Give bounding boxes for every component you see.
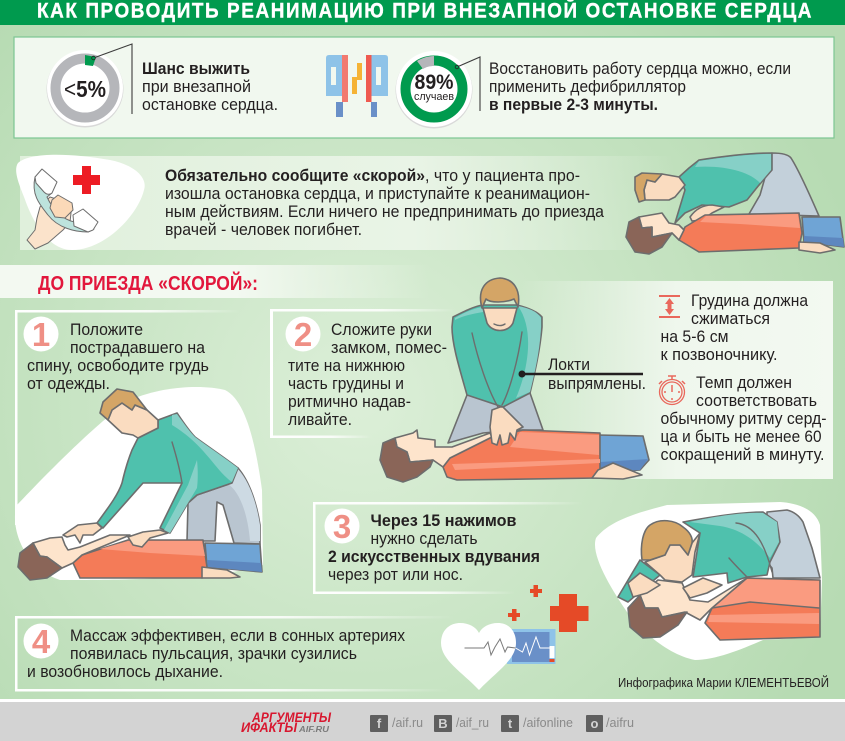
text: compression rate: соответствовать (696, 392, 817, 410)
text: step 2: ливайте. (288, 411, 352, 429)
logo: AIF.RU (298, 725, 329, 734)
text: step 1: от одежды. (27, 375, 110, 393)
panel: survival statistics (14, 37, 834, 138)
text: compression depth (660, 292, 809, 364)
logo: АРГУМЕНТЫ (251, 710, 331, 725)
text: step 2: часть грудины и (288, 375, 404, 393)
text: step 4: Массаж эффективен, если в сонных артериях (70, 627, 406, 645)
icon: hand holding phone (27, 169, 98, 249)
heading: before ambulance arrives (0, 265, 430, 298)
step number 2 (286, 316, 320, 353)
panel: call ambulance (16, 153, 844, 254)
text: step 1: Положите (70, 321, 143, 339)
text: step 3: Через 15 нажимов (370, 512, 516, 530)
text: defibrillator timing: в первые 2-3 минуты. (489, 96, 658, 114)
callout: straight elbows (518, 356, 646, 393)
step number 3 (324, 508, 360, 545)
social: vk (434, 715, 489, 732)
text: defibrillator timing: Восстановить работу сердца можно, если (489, 60, 791, 78)
text: step 1 (27, 321, 209, 393)
text: compression depth: Грудина должна (691, 292, 809, 310)
step number 1 (24, 316, 58, 353)
step number 3: 3 (333, 508, 351, 545)
footer (0, 699, 845, 741)
text: defibrillator timing: применить дефибриллятор (489, 78, 686, 96)
social: odnoklassniki: /aifru (606, 716, 634, 730)
chart: defibrillator donut 89% (396, 51, 480, 128)
text: compression rate: обычному ритму серд- (660, 410, 826, 428)
icon: red cross (73, 166, 100, 194)
text: step 1: пострадавшего на (70, 339, 206, 357)
social: twitter: t (508, 716, 513, 731)
text: survival chance: Шанс выжить (142, 60, 250, 78)
text: defibrillator timing (489, 60, 791, 114)
icon: stopwatch (659, 376, 685, 404)
panel: step 1 (15, 310, 263, 580)
heading: before ambulance arrives: ДО ПРИЕЗДА «СКОРОЙ»: (38, 271, 258, 295)
text: compression rate: Темп должен (696, 374, 792, 392)
icon: compression depth (659, 295, 680, 318)
callout: straight elbows: выпрямлены. (548, 375, 646, 393)
text: step 4: и возобновилось дыхание. (27, 663, 223, 681)
text: compression rate: ца и быть не менее 60 (660, 428, 822, 446)
step number 4 (24, 623, 58, 660)
social: odnoklassniki: о (591, 716, 599, 731)
text: call instruction (165, 167, 605, 239)
illustration: white blob behind rescue breaths (595, 502, 822, 660)
frame and blob (15, 310, 263, 580)
text: step 2 (288, 321, 447, 429)
text: call instruction: ным действиям. Если ничего не предпринимать до приезда (165, 203, 605, 221)
text: step 2: Сложите руки (331, 321, 432, 339)
panel: step 3 (313, 502, 822, 660)
step number 1: 1 (32, 316, 50, 353)
credit: Инфографика Марии КЛЕМЕНТЬЕВОЙ (618, 675, 829, 690)
text: survival chance: при внезапной (142, 78, 251, 96)
icon: defibrillator paddles (326, 55, 388, 117)
text: step 1: спину, освободите грудь (27, 357, 209, 375)
social: odnoklassniki (586, 715, 634, 732)
text: survival chance: остановке сердца. (142, 96, 278, 114)
frame (15, 616, 455, 692)
text: call instruction: изошла остановка сердца, и приступайте к реанимацион- (165, 185, 590, 203)
callout: straight elbows: Локти (548, 356, 590, 374)
text: call instruction: врачей - человек погибнет. (165, 221, 362, 239)
text: step 3 (328, 512, 540, 584)
panel: step 2 (270, 278, 649, 482)
step number 2: 2 (294, 316, 312, 353)
logo: ИФАКТЫ (241, 720, 297, 735)
text: step 4: появилась пульсация, зрачки сузились (70, 645, 357, 663)
text: step 3: через рот или нос. (328, 566, 463, 584)
chart: defibrillator donut 89%: 89% (414, 71, 454, 94)
text: step 3: 2 искусственных вдувания (328, 548, 540, 566)
text: step 2: тите на нижнюю (288, 357, 405, 375)
icon: white blob behind phone (16, 155, 145, 250)
social: twitter: /aifonline (523, 716, 573, 730)
text: call instruction: Обязательно сообщите «скорой» (165, 167, 425, 185)
text: compression rate (660, 374, 826, 464)
step number 4: 4 (32, 623, 51, 660)
text: compression rate: сокращений в минуту. (660, 446, 824, 464)
title bar: КАК ПРОВОДИТЬ РЕАНИМАЦИЮ ПРИ ВНЕЗАПНОЙ ОСТАНОВКЕ СЕРДЦА (37, 0, 812, 23)
text: step 2: ритмично надав- (288, 393, 411, 411)
illustration: rescuer checks patient (626, 153, 844, 254)
illustration: rescue breaths (618, 510, 820, 640)
text: call instruction: , что у пациента про- (425, 167, 580, 185)
chart: defibrillator donut 89%: случаев (414, 91, 454, 103)
text: compression depth: к позвоночнику. (660, 346, 778, 364)
illustration: chest compressions (380, 278, 649, 482)
frame (270, 309, 455, 438)
icon: heart monitor with crosses (441, 585, 588, 690)
illustration: rescuer and patient (18, 389, 262, 580)
text: step 3: нужно сделать (370, 530, 478, 548)
text: step 4 (27, 627, 406, 681)
social: facebook: /aif.ru (392, 716, 423, 730)
chart: survival donut under 5%: <5% (64, 76, 106, 102)
frame (313, 502, 583, 594)
social: vk: /aif_ru (456, 716, 489, 730)
chart: survival donut under 5% (46, 44, 132, 128)
social: twitter (501, 715, 573, 732)
text: survival chance (142, 60, 278, 114)
logo (241, 710, 331, 735)
social: facebook: f (377, 716, 382, 731)
text: compression depth: сжиматься (691, 310, 770, 328)
social: vk: B (438, 716, 448, 731)
panel: compression depth and rate (520, 281, 833, 479)
text: compression depth: на 5-6 см (660, 328, 728, 346)
text: step 2: замком, помес- (331, 339, 447, 357)
social: facebook (370, 715, 423, 732)
panel: step 4 (15, 616, 455, 692)
